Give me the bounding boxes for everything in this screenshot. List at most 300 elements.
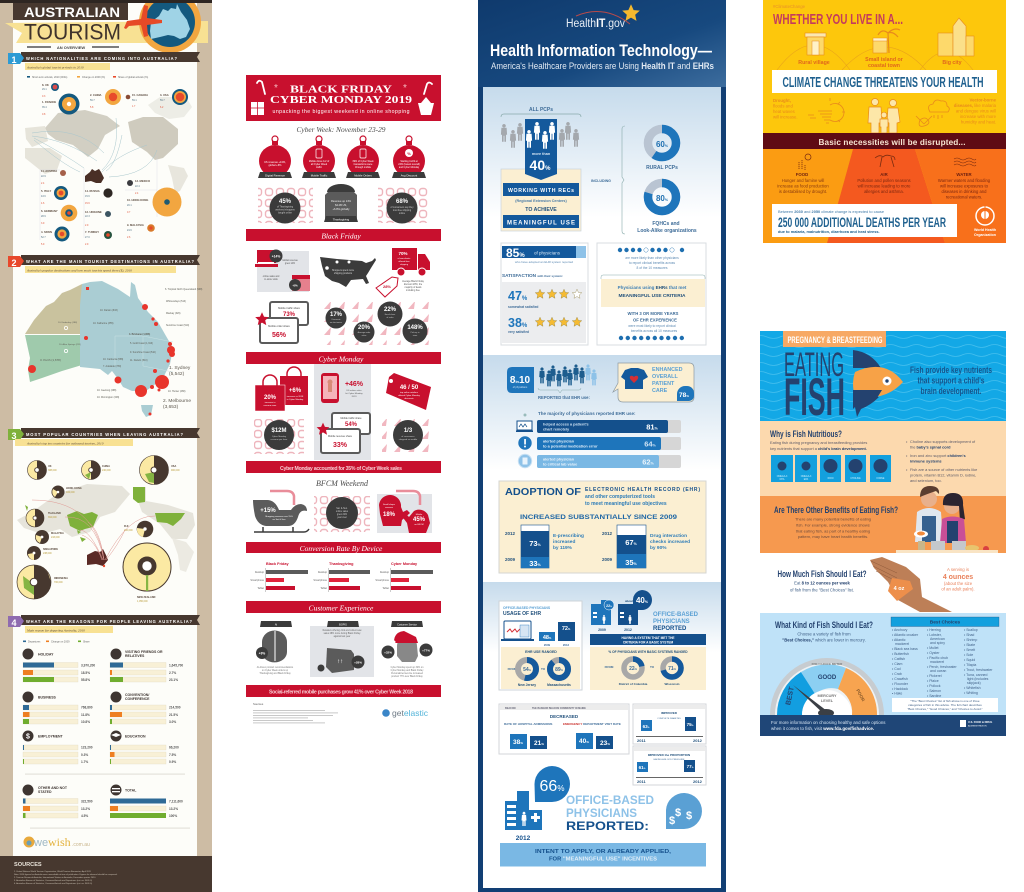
section 2 heading: 2: [11, 258, 17, 268]
chart: visiting friends or relatives: 1,645,700: [169, 664, 183, 668]
box: meaningful use criteria: to report clinical benefits across: [629, 261, 675, 265]
header banner: CYBER MONDAY 2019: [270, 95, 412, 106]
section: why is fish nutritious: Iron and zinc support children's: [910, 453, 966, 458]
block: all PCPs: ALL PCPs: [529, 107, 553, 113]
icon: people group: REPORTED that EHR use:: [538, 395, 590, 400]
header banner: BLACK FRIDAY: [290, 84, 393, 96]
block: food: increase as food production: [777, 184, 829, 188]
block: returns box: Retailers offering click and collect saw: [323, 629, 362, 632]
box: meaningful use criteria: were most likely to report clinical: [628, 324, 676, 328]
icon: building with 66% bubble: 2012: [516, 835, 531, 842]
sources: 3. Australian Bureau of Statistics, Overseas Arrivals and Departures (cat. no. 3401.0): [14, 879, 92, 882]
panel: Eating Fish infographic: [760, 331, 1006, 736]
chart: education: [110, 730, 179, 764]
stat: 68% with pattern: [378, 187, 428, 224]
icon: big city: Big city: [942, 60, 962, 66]
callout: serving size: of an adult palm).: [941, 586, 975, 592]
section band: Cyber Monday share: [246, 461, 441, 473]
icon: delivery truck: 70%: [398, 251, 408, 256]
icon: phone with gingerbread: [321, 373, 364, 403]
chart: arrivals bubbles by nationality: 29.1: [42, 88, 47, 91]
gauge: mercury meter: LEVEL: [821, 699, 834, 703]
box: usage of EHR: TO: [541, 667, 546, 671]
callout: enhanced patient care: OVERALL: [652, 374, 678, 380]
chart: outbound pies: FIJI: [124, 525, 129, 528]
section band: Cyber Monday share: Cyber Monday accounted for 35% of Cyber Week sales: [280, 466, 402, 472]
chart: arrivals bubbles by nationality: 22.3: [85, 215, 90, 218]
subheading: Cyber Week: Cyber Week: November 23-29: [296, 125, 386, 134]
bar chart: majority of physicians reported EHR use: chart remotely: [543, 428, 570, 432]
block: air: Pollution and pollen seasons: [857, 178, 911, 183]
box: improved 2011-2012 second: 2012: [693, 779, 703, 784]
chart: arrivals bubbles by nationality: 27.0: [85, 236, 90, 239]
chart: employment: EMPLOYMENT: [38, 734, 64, 738]
box: adoption of EHR: 73%: [529, 539, 542, 548]
logo: wewish: [24, 835, 90, 849]
map: world with flight paths: [25, 97, 192, 240]
chart: outbound pies: 184,000: [66, 491, 75, 494]
ornament: mobile traffic: [302, 136, 336, 178]
chart: outbound pies: UK: [48, 465, 52, 468]
chart: convention or conference: 21.5%: [169, 713, 178, 717]
legend: arrivals: Change on 2009 (%): [82, 76, 105, 79]
block: customer service: [382, 621, 432, 678]
label: including with bracket: INCLUDING: [591, 179, 611, 183]
section 4 heading: 4: [11, 618, 17, 628]
block: food: FOOD: [796, 172, 808, 177]
section: what kind of fish: [760, 613, 1006, 715]
text: drought: floods and: [773, 104, 793, 108]
subtitle: an overview: [27, 45, 119, 50]
section: why is fish nutritious: [760, 421, 1006, 496]
ornament: mobile orders: transactions were: [354, 163, 373, 166]
gauge: mercury meter: MERCURY: [817, 694, 837, 698]
stat: BFCM circle: online sales: [336, 511, 349, 513]
map: Australian regions: 10. Geelong (498): [97, 389, 116, 392]
list: best choices: • Mullet: [927, 646, 939, 650]
icon: delivery truck: of merchants: [398, 257, 411, 260]
chart: employment: 0.3%: [81, 753, 88, 757]
chart: visiting friends or relatives: RELATIVES: [125, 654, 145, 658]
ornament: mobile traffic: Mobile drove 1/2 of: [309, 160, 329, 163]
box: improved 2011-2012 second: HAVING A BLOOD PRESSURE: [654, 758, 685, 761]
donut: 80% FQHCs: [637, 183, 697, 234]
box: adoption of EHR: increased: [553, 539, 575, 545]
icon: small island: Small island or: [865, 57, 903, 63]
icon: small island: [842, 29, 926, 70]
mittens panel: Mobile: [416, 514, 423, 516]
stat: 1/3: 1/3: [404, 428, 413, 434]
chart: holiday: 55.8%: [81, 678, 90, 682]
block: Black Friday laptop and store: -6%: [292, 284, 298, 288]
block: office-based physicians reported basic system: % OF PHYSICIANS WITH BASIC SYSTEMS RANGED: [608, 650, 688, 654]
bar chart: Cyber Monday conversion: Smartphone: [375, 579, 390, 582]
chart: arrivals bubbles by nationality: 3.9: [41, 222, 45, 225]
chart: visiting friends or relatives: 2.7%: [169, 671, 176, 675]
chart: total: TOTAL: [125, 788, 137, 792]
chart: holiday: [22, 648, 95, 682]
footer: more information: ADMINISTRATION: [968, 724, 987, 728]
chart: arrivals bubbles by nationality: 59.1: [132, 99, 137, 102]
box: usage of EHR: 2009: [544, 643, 551, 647]
section 4 heading: [8, 615, 200, 634]
block: office-based physicians reported basic system: 22%: [629, 666, 638, 672]
block: office-based physicians reported basic system: REPORTED: [653, 626, 687, 632]
stats: Black Friday circles: 20%: [358, 325, 371, 331]
block: office-based physicians reported basic system: FROM: [605, 665, 614, 669]
stat: 45% with pattern: bought online: [278, 212, 293, 214]
title: whether you live in a: WHETHER YOU LIVE IN A...: [773, 11, 903, 28]
block: returns box: ↑↑: [337, 659, 343, 665]
map: USA: Shoppers spent more: [332, 269, 355, 272]
callout: enhanced patient care: [613, 363, 694, 402]
illustration: hand with fish: [870, 557, 952, 612]
box: usage of EHR: 72%: [562, 626, 571, 632]
chart: arrivals bubbles by nationality: 0.3: [42, 95, 46, 98]
icon: delivery truck: shipping: [400, 264, 409, 266]
box: usage of EHR: OFFICE-BASED PHYSICIANS: [503, 606, 551, 610]
map: Australian regions: 10. Hunter (468): [168, 390, 186, 393]
section band: Customer Experience: Customer Experience: [309, 604, 374, 612]
chart: total: 100%: [169, 814, 177, 818]
section: what kind of fish: "Best Choices," which are lower in mercury.: [782, 638, 866, 642]
section: why is fish nutritious: OMEGA-3: [801, 475, 812, 478]
chart: business: 768,800: [81, 706, 93, 710]
list: best choices: and ocean: [930, 669, 946, 673]
chart: arrivals bubbles by nationality: 4. SPAIN: [41, 230, 52, 234]
box: usage of EHR: [499, 601, 582, 690]
legend: arrivals: [27, 76, 148, 79]
chart: holiday: HOLIDAY: [38, 652, 54, 656]
chart: arrivals bubbles by nationality: 4.6: [41, 202, 45, 205]
section 3 heading: MOST POPULAR COUNTRIES WHEN LEAVING AUSTRALIA?: [26, 432, 183, 437]
sources: Note: 2010 figures for Australia were unavailable at time of publication. Figures for inbound should be compared.: [14, 873, 118, 876]
text: vector-borne: [954, 98, 997, 124]
ornament: mobile traffic: traffic: [316, 166, 323, 169]
chart: arrivals bubbles by nationality: 15.6: [85, 195, 90, 198]
bar chart: majority of physicians reported EHR use: helped access a patient's: [543, 422, 589, 426]
band: basic necessities: [763, 133, 1006, 149]
footer: more information: For more information on choosing healthy and safe options: [771, 720, 886, 725]
chart: outbound pies: 900,000: [171, 469, 180, 472]
block: office-based physicians reported basic system: 2009: [598, 628, 606, 632]
block: Black Friday laptop and store: Global revenue: [282, 259, 299, 262]
section 3 heading: [8, 428, 200, 446]
box: hospital admissions decreased: 40%: [579, 738, 589, 745]
box: meaningful use criteria: OF EHR EXPERIENCE: [633, 318, 677, 322]
icon: sleigh: +15%: [260, 508, 276, 514]
section 4 heading: WHAT ARE THE REASONS FOR PEOPLE LEAVING AUSTRALIA?: [26, 619, 192, 624]
donut: 60% rural PCPs: RURAL PCPs: [646, 165, 678, 171]
icon: sleigh: on Sat & Sun: [273, 518, 286, 521]
box: adoption of EHR: 67%: [625, 538, 638, 547]
box: 85% satisfaction: 38%: [508, 316, 528, 330]
list: best choices: • Crab: [892, 672, 902, 676]
tablets: Cyber Monday mobile shares: Mobile traffic share: [340, 417, 362, 420]
block: returns box: sales 28% more during Black Friday: [324, 632, 361, 635]
list: best choices: • Whiting: [964, 691, 978, 695]
map: Australian regions: 5. Gold Coast (1,316): [130, 342, 153, 345]
bar chart: Cyber Monday conversion: Desktop: [380, 571, 390, 574]
chart: other and not stated: [22, 784, 93, 818]
box: improved 2011-2012 first: [633, 704, 706, 744]
icon: discount tag: Average Black Friday: [402, 280, 425, 283]
gauge: mercury meter: GOOD: [818, 675, 837, 681]
block: water: [915, 149, 1006, 243]
block: AI brain: AI-driven product recommendations: [257, 666, 294, 669]
ornament: digital revenue: Digital Revenue: [265, 174, 285, 178]
text: vector-borne: diseases, like malaria: [954, 103, 997, 108]
block: all PCPs: (Regional Extension Centers): [515, 199, 567, 203]
box: adoption of EHR: Drug interaction: [650, 533, 687, 539]
section 2 heading: Australia's popular destinations and how much tourists spend there ($), 2010: [26, 268, 132, 274]
header banner: *: [403, 83, 407, 94]
section: why is fish nutritious: Choline also supports development of: [910, 439, 976, 444]
bar chart: majority of physicians reported EHR use: 62%: [642, 458, 655, 466]
sources: 4. Australian Bureau of Statistics, Overseas Arrivals and Departures (cat. no. 3401.0): [14, 882, 92, 885]
panel: Black Friday Cyber Monday infographic: [246, 75, 441, 723]
bar chart: majority of physicians reported EHR use: 81%: [646, 422, 659, 432]
list: best choices: • Flounder: [892, 682, 909, 686]
tablets: Black Friday mobile shares: Mobile traffic share: [278, 306, 300, 310]
bar chart: Thanksgiving conversion: Tablet: [320, 587, 327, 590]
box: hospital admissions decreased: 38%: [513, 739, 523, 746]
icon: price tag 46/50: [386, 373, 431, 410]
ornament: digital revenue: global +6%: [269, 163, 282, 167]
sources: 1. United Nations World Tourism Organization, World Tourism Barometer, April 2011: [14, 870, 92, 873]
box: 85% satisfaction: SATISFACTION with their system:: [502, 273, 563, 278]
callout: serving size: A serving is: [947, 567, 969, 572]
stat: $12M: $12M: [271, 428, 287, 434]
stat: BFCM circle: [314, 496, 370, 532]
sources: 2. Tourism Research Australia, International Visitors in Australia, December quarter 2010: [14, 876, 96, 879]
box: meaningful use criteria: benefits across all 10 measures: [631, 329, 678, 333]
gauge: mercury meter: BEST: [785, 686, 796, 706]
chart: outbound pies: 200,000: [124, 529, 133, 532]
list: best choices: • Perch, freshwater: [927, 665, 957, 669]
chart: outbound pies: 1,050,000: [137, 600, 148, 603]
chart: arrivals bubbles by nationality: [41, 83, 188, 246]
block: office-based physicians reported basic system: HAVING A SYSTEM THAT MET THE: [621, 636, 675, 640]
chart: arrivals bubbles by nationality: 0.8: [42, 113, 46, 116]
icon: price tag 46/50: top online retailers: [400, 391, 419, 394]
section band: Conversion Rate: [246, 542, 441, 553]
map: Australian regions: 10. Katherine (355): [93, 322, 114, 325]
icon: phone with gingerbread: +46%: [345, 381, 364, 388]
chart: arrivals bubbles by nationality: 56.7: [90, 99, 95, 102]
section: why is fish nutritious: the baby's spinal cord: [910, 444, 951, 450]
chart: business: 10.8%: [81, 720, 90, 724]
box: adoption of EHR: 2012: [602, 531, 613, 536]
map: Australian regions: 10. Mornington (348): [97, 396, 119, 399]
section: why is fish nutritious: Eating fish during pregnancy and breastfeeding provides: [770, 440, 867, 445]
gauge: mercury meter: POOR: [855, 688, 866, 703]
icon: rural village: Rural village: [798, 60, 830, 66]
title: [490, 42, 714, 72]
ornament: mobile orders: 39% of Cyber Week: [352, 160, 374, 163]
tablets: Black Friday mobile shares: [255, 302, 308, 343]
chart: total: 13.2%: [169, 807, 178, 811]
panel: Australian Tourism infographic: [0, 0, 212, 892]
chart: arrivals bubbles by nationality: 0.7: [127, 211, 131, 214]
block: returns box: [310, 621, 374, 677]
chart: arrivals bubbles by nationality: 12. UKRAINE: [85, 210, 102, 214]
donut: 80% FQHCs: FQHCs and: [652, 221, 680, 227]
block: customer service: +32%: [384, 650, 392, 654]
ornament: avg discount: %: [407, 151, 411, 156]
block: Black Friday laptop and store: +14%: [272, 254, 280, 258]
list: best choices: • Plaice: [927, 679, 939, 683]
box: hospital admissions decreased: THE BANGOR BEACON COMMUNITY IN MAINE: [532, 707, 586, 710]
list: best choices: • Sole: [964, 653, 973, 657]
ornament: mobile orders: [346, 136, 380, 178]
legend: arrivals: Short-term arrivals, 2010 (000s): [32, 76, 67, 79]
icon: shopping bags: increase vs 2018: [287, 395, 304, 398]
bar chart: Thanksgiving conversion: Thanksgiving: [329, 562, 354, 566]
logo: wewish: wish: [48, 835, 71, 849]
chart: convention or conference: 214,500: [169, 706, 181, 710]
box: improved 2011-2012 first: COMPLETE DIABETES: [657, 717, 681, 720]
list: best choices: • Atlantic: [892, 638, 906, 642]
stat: $12M: [254, 419, 304, 454]
chart: business: [22, 692, 93, 724]
box: improved 2011-2012 first: 75 %: [687, 722, 694, 727]
section: what kind of fish: What Kind of Fish Should I Eat?: [775, 620, 873, 631]
tablets: Cyber Monday mobile shares: Mobile revenue share: [328, 435, 353, 438]
stat: 1/3: shopped on mobile: [399, 439, 418, 441]
map: Australian regions: 10. Darwin (633): [100, 309, 118, 312]
box: hospital admissions decreased: RATE OF HOSPITAL ADMISSIONS: [504, 722, 552, 726]
map: USA: [320, 257, 376, 287]
footer: more information: [760, 715, 1006, 736]
map: Australian regions: Mackay (326): [166, 312, 181, 315]
list: best choices: light (includes: [967, 677, 989, 681]
bar chart: majority of physicians reported EHR use: alerted physician: [543, 440, 575, 444]
section: other benefits: fish. For example, strong evidence shows: [796, 522, 870, 528]
ornament: mobile orders: through mobile: [355, 166, 372, 169]
list: best choices: • Oyster: [927, 651, 940, 655]
map: Australian regions: 1. Sydney: [169, 365, 191, 371]
chart: other and not stated: 322,500: [81, 800, 93, 804]
chart: business: BUSINESS: [38, 696, 57, 700]
map: outbound destinations: [17, 484, 195, 572]
section band: Black Friday: Black Friday: [321, 232, 361, 240]
block: water: diseases in drinking and: [942, 189, 987, 194]
callout: enhanced patient care: 78%: [679, 392, 689, 399]
block: returns box: against last year: [334, 635, 351, 638]
stats: Black Friday circles: Email share: [385, 314, 396, 316]
banner: climate change threatens your health: [772, 70, 997, 93]
bar chart: majority of physicians reported EHR use: The majority of physicians reported EHR use:: [538, 411, 636, 416]
section 3 heading: 3: [11, 431, 17, 441]
icon: phone with gingerbread: US online sales: [346, 390, 363, 392]
icon: sun and tornado: [808, 98, 845, 123]
box: improved 2011-2012 second: [633, 746, 706, 785]
logo: World Health Organization: World Health: [974, 228, 996, 232]
icon: building with 66% bubble: 66%: [540, 778, 564, 795]
chart: arrivals bubbles by nationality: 35.4: [42, 106, 47, 109]
box: improved 2011-2012 first: 2012: [693, 738, 703, 743]
icon: people group: [538, 364, 597, 400]
sources: Sources: [253, 702, 264, 706]
bar chart: Thanksgiving conversion: Smartphone: [313, 579, 328, 582]
donut: 60% rural PCPs: [646, 129, 678, 171]
list: best choices: American: [930, 637, 945, 641]
box: hospital admissions decreased: 23%: [600, 740, 610, 747]
text: drought: Drought,: [773, 98, 791, 103]
section: why is fish nutritious: immune systems: [910, 458, 942, 464]
section 2 heading: WHAT ARE THE MAIN TOURIST DESTINATIONS IN AUSTRALIA?: [26, 259, 194, 264]
section: why is fish nutritious: •: [906, 439, 908, 444]
section 3 heading: Australia's top ten countries for outbound tourism, 2010: [26, 442, 104, 446]
icon: shopping bags: [255, 367, 308, 411]
callout: additional deaths: [772, 204, 957, 237]
block: Black Friday laptop and store: online sales and: [263, 276, 280, 278]
badge: 8 in 10 physicians: of physicians: [513, 386, 528, 389]
section: other benefits: Are There Other Benefits of Eating Fish?: [774, 505, 898, 515]
stat: BFCM circle: Sat. & Sun.: [336, 507, 348, 510]
header: eating fish: FISH: [784, 368, 845, 427]
box: adoption of EHR: 2012: [505, 531, 516, 536]
tablets: Cyber Monday mobile shares: 33%: [333, 442, 348, 449]
block: AI brain: [256, 621, 294, 675]
logo: wewish: .com.au: [72, 842, 90, 848]
callout: enhanced patient care: CARE: [652, 388, 668, 394]
section band: Cyber Monday: [246, 352, 441, 364]
chart: arrivals bubbles by nationality: 10. HONG KONG: [127, 198, 148, 202]
block: office-based physicians reported basic system: 40%: [636, 596, 649, 605]
box: hospital admissions decreased: [499, 704, 629, 754]
section: why is fish nutritious: key nutrients that support a child's brain development.: [770, 446, 867, 451]
stat: 68% with pattern: trust free shipping: [393, 209, 412, 212]
section: why is fish nutritious: OMEGA-3: [777, 475, 788, 478]
chart: arrivals bubbles by nationality: 11. AUSTRIA: [41, 169, 57, 173]
icon: dollars bubble: [666, 793, 702, 829]
box: 85% satisfaction: 47%: [508, 289, 528, 303]
block: office-based physicians reported basic system: about: [625, 599, 633, 603]
icon: dollars bubble: $: [675, 807, 681, 819]
legend: arrivals: Share of global arrivals (%): [118, 76, 148, 79]
ornament: mobile traffic: Mobile Traffic: [311, 174, 328, 178]
chart: education: 66,200: [169, 746, 179, 750]
section: why is fish nutritious: protein, vitamin B12, vitamin D, iodine,: [910, 472, 976, 478]
section: why is fish nutritious: IRON: [828, 478, 834, 480]
icon: price tag 46/50: offered Cyber Monday: [398, 394, 421, 397]
section 1 heading: Australia's global tourist arrivals in 2010: [26, 66, 84, 70]
block: all PCPs: TO ACHIEVE: [525, 207, 557, 213]
list: best choices: • Trout, freshwater: [964, 668, 993, 672]
list: best choices: mackerel: [895, 642, 909, 646]
chart: arrivals bubbles by nationality: 59.7: [160, 99, 165, 102]
box: adoption of EHR: by 90%: [650, 545, 667, 551]
list: best choices: • Herring: [927, 628, 941, 632]
text: drought: [773, 98, 798, 120]
icon: shopping bags: in Cyber Monday: [287, 398, 304, 401]
list: best choices: • Cod: [892, 667, 901, 671]
icon: sleigh: [253, 491, 309, 532]
chart: outbound pies: 243,000: [51, 536, 60, 539]
chart: arrivals bubbles by nationality: 52.7: [41, 236, 46, 239]
tablets: Black Friday mobile shares: 73%: [283, 312, 296, 318]
title: Australian Tourism: AUSTRALIAN: [24, 4, 120, 20]
map: Australian regions: (5,542): [169, 371, 185, 377]
box: 85% satisfaction: [501, 243, 588, 345]
icon: phone with gingerbread: hit Cyber Monday: [345, 392, 363, 395]
block: office-based physicians reported basic system: [590, 590, 706, 690]
section 4 heading: Main reason for departing Australia, 2010: [26, 628, 85, 634]
section band: Black Friday: [246, 229, 441, 241]
block: water: will increase exposures to: [940, 184, 989, 188]
